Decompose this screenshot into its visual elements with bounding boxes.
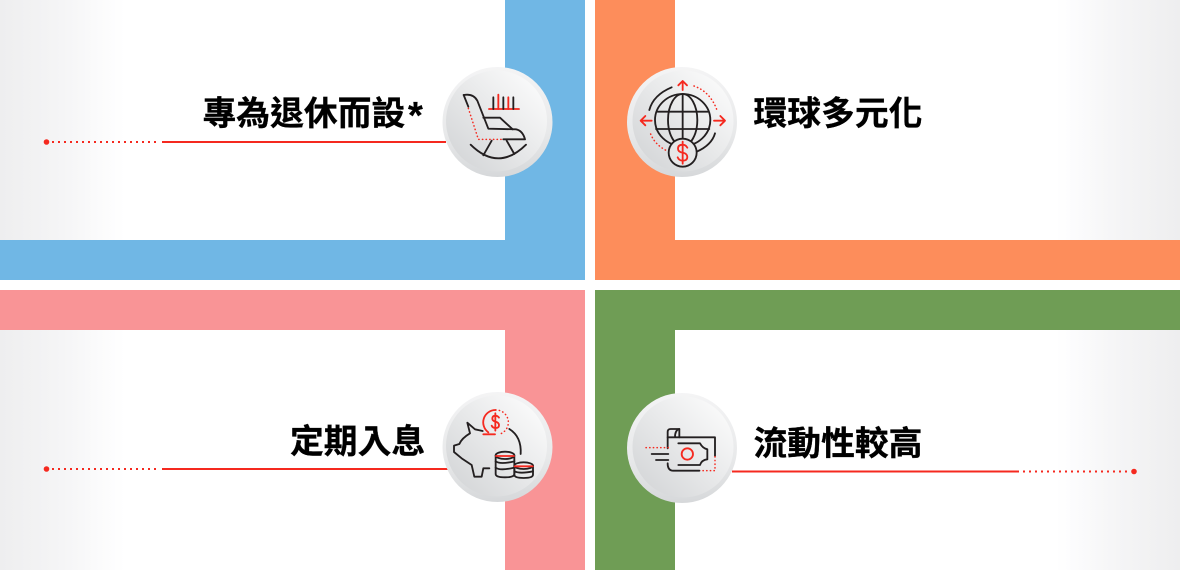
panel: top-right background fade xyxy=(1056,0,1180,240)
panel: top-left background fade xyxy=(0,0,125,240)
leader line: top-left xyxy=(44,139,446,145)
heading: designed for retirement: 專為退休而設 xyxy=(202,95,405,133)
heading: regular income: 定期入息 xyxy=(290,423,425,461)
leader line: bottom-right xyxy=(732,469,1137,474)
icon: banknote badge xyxy=(627,393,737,503)
panel: bottom-right background fade xyxy=(1056,330,1180,570)
panel: orange corner bar xyxy=(595,0,1180,280)
panel: blue corner bar xyxy=(0,0,585,280)
panel: green corner bar xyxy=(595,290,1180,570)
leader line: bottom-left xyxy=(44,466,448,472)
panel: bottom-left background fade xyxy=(0,330,125,570)
icon: rocking chair badge xyxy=(442,67,552,177)
panel: pink corner bar xyxy=(0,290,585,570)
heading: global diversification: 環球多元化 xyxy=(754,95,922,133)
heading: designed for retirement: * xyxy=(408,95,423,137)
icon: globe and dollar badge xyxy=(627,67,737,177)
icon: piggy bank badge xyxy=(442,392,552,502)
heading: higher liquidity: 流動性較高 xyxy=(754,425,922,463)
